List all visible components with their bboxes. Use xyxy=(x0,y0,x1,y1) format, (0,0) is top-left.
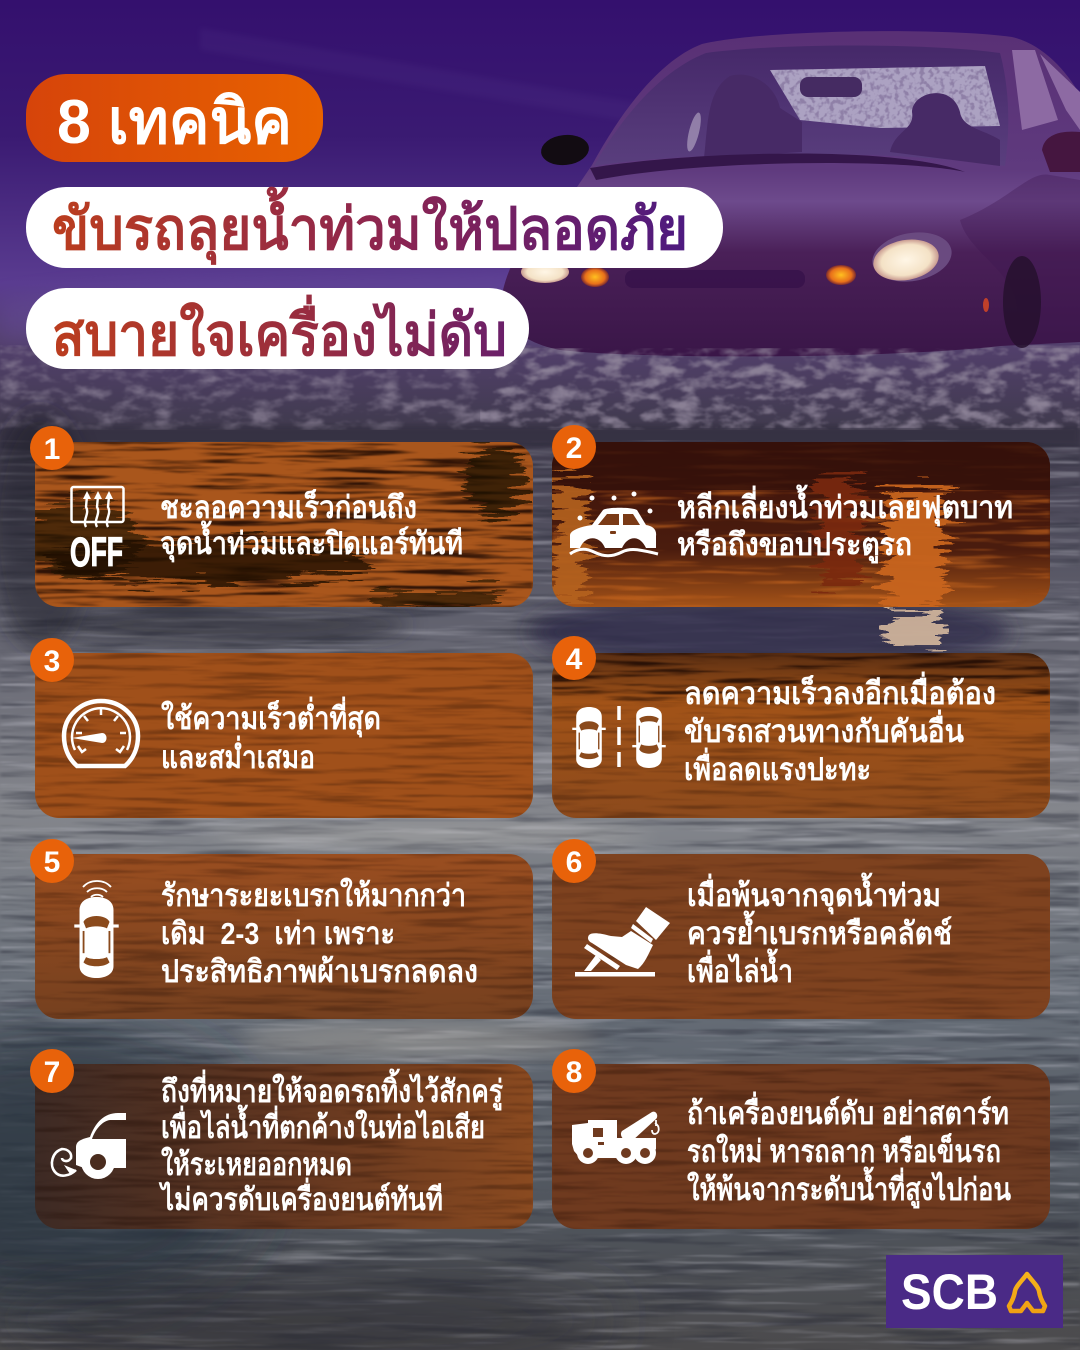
text: tip 4: ลดความเร็วลงอีกเมื่อต้อง xyxy=(684,671,996,711)
icon: car with proximity sensor xyxy=(74,881,119,978)
text: tip 1 xyxy=(160,488,463,563)
icon: rear defrost off: OFF xyxy=(70,529,123,575)
text: tip 3: ใช้ความเร็วต่ำที่สุด xyxy=(161,696,381,738)
text: tip 4: เพื่อลดแรงปะทะ xyxy=(684,747,871,787)
text: tip 7: ให้ระเหยออกหมด xyxy=(161,1146,352,1182)
panel: tip 5 xyxy=(30,839,533,1019)
badge: number 2 xyxy=(552,425,596,469)
text: tip 2 xyxy=(677,484,1013,564)
text: tip 4: ขับรถสวนทางกับคันอื่น xyxy=(684,709,964,749)
text: tip 7 xyxy=(158,1068,503,1217)
icon: foot pressing brake pedal xyxy=(575,907,670,976)
logo: SCB xyxy=(886,1255,1063,1328)
text: tip 7: ไม่ควรดับเครื่องยนต์ทันที xyxy=(158,1177,443,1217)
text: tip 1: ชะลอความเร็วก่อนถึง xyxy=(160,488,417,525)
panel: tip 3 xyxy=(30,638,533,818)
text: tip 7: เพื่อไล่น้ำที่ตกค้างในท่อไอเสีย xyxy=(161,1104,485,1145)
icon: tow truck xyxy=(572,1112,659,1164)
text: tip 5: รักษาระยะเบรกให้มากกว่า xyxy=(161,877,466,913)
badge: number 5 xyxy=(30,839,74,883)
panel: tip 8 xyxy=(552,1049,1050,1229)
text: tip 5 xyxy=(161,877,478,989)
text: tip 7: ถึงที่หมายให้จอดรถทิ้งไว้สักครู่ xyxy=(161,1068,503,1111)
heading: drive through flood safely: ขับรถลุยน้ำท่วมให้ปลอดภัย xyxy=(52,187,688,266)
text: tip 5: เดิม 2-3 เท่า เพราะ xyxy=(161,916,395,951)
text: tip 8: รถใหม่ หารถลาก หรือเข็นรถ xyxy=(687,1132,1001,1169)
text: tip 1: จุดน้ำท่วมและปิดแอร์ทันที xyxy=(160,520,463,563)
logo: SCB: SCB xyxy=(901,1264,998,1320)
badge: number 6: 6 xyxy=(566,846,582,879)
badge: number 2: 2 xyxy=(566,432,582,465)
icon: car in flood water xyxy=(570,492,658,556)
heading: 8 techniques pill xyxy=(26,74,323,162)
badge: number 4 xyxy=(552,636,596,680)
text: tip 8: ให้พ้นจากระดับน้ำที่สูงไปก่อน xyxy=(687,1166,1011,1209)
text: tip 2: หรือถึงขอบประตูรถ xyxy=(677,527,912,564)
badge: number 1: 1 xyxy=(44,433,60,466)
badge: number 1 xyxy=(30,426,74,470)
text: tip 6: เพื่อไล่น้ำ xyxy=(687,948,793,989)
badge: number 3 xyxy=(30,638,74,682)
icon: rear defrost off xyxy=(70,487,124,575)
text: tip 3: และสม่ำเสมอ xyxy=(161,735,315,775)
icon: car exhaust xyxy=(52,1113,126,1179)
photo: purple car driving through flood water xyxy=(480,31,1080,428)
text: tip 5: ประสิทธิภาพผ้าเบรกลดลง xyxy=(161,954,478,989)
text: tip 4 xyxy=(684,671,996,787)
panel: tip 4 xyxy=(552,636,1050,818)
badge: number 4: 4 xyxy=(566,643,583,676)
icon: speedometer xyxy=(64,701,138,766)
text: tip 8: ถ้าเครื่องยนต์ดับ อย่าสตาร์ท xyxy=(687,1091,1009,1131)
text: tip 8 xyxy=(687,1091,1011,1209)
text: tip 2: หลีกเลี่ยงน้ำท่วมเลยฟุตบาท xyxy=(677,484,1013,527)
text: tip 3 xyxy=(161,696,381,775)
badge: number 6 xyxy=(552,839,596,883)
panel: tip 6 xyxy=(552,839,1050,1019)
icon: two cars passing xyxy=(572,706,666,768)
badge: number 7 xyxy=(30,1049,74,1093)
badge: number 8: 8 xyxy=(566,1056,582,1089)
badge: number 5: 5 xyxy=(44,846,60,879)
panel: tip 7 xyxy=(30,1049,533,1229)
panel: tip 1 xyxy=(20,426,533,610)
badge: number 7: 7 xyxy=(44,1056,60,1089)
heading: 8 techniques pill: 8 เทคนิค xyxy=(57,88,292,157)
text: tip 6: ควรย้ำเบรกหรือคลัตช์ xyxy=(687,910,952,951)
text: tip 6: เมื่อพ้นจากจุดน้ำท่วม xyxy=(687,872,941,915)
text: tip 6 xyxy=(687,872,952,989)
badge: number 3: 3 xyxy=(44,645,60,678)
panel: tip 2 xyxy=(552,425,1050,607)
heading: engine will not stall: สบายใจเครื่องไม่ดับ xyxy=(52,294,507,368)
badge: number 8 xyxy=(552,1049,596,1093)
